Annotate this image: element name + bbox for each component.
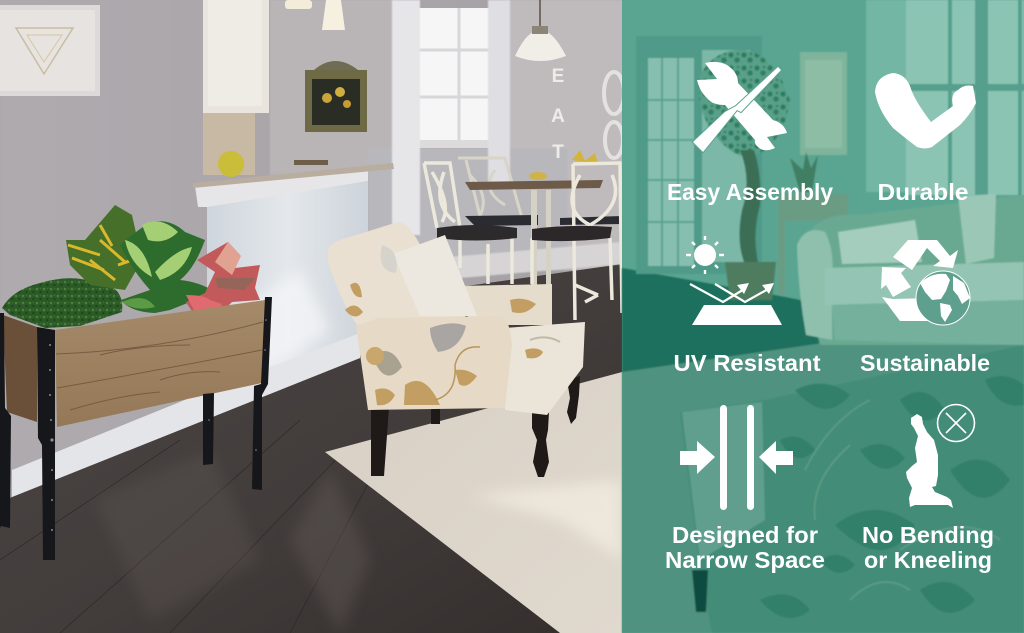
floral pattern [345,245,560,405]
tinted rug [622,342,1024,633]
teal overlay panel [622,0,1024,633]
feature: designed for narrow space [665,405,825,573]
icon: sun and reflected rays [686,236,782,325]
tinted flowers [790,152,818,192]
icon: wrench and screwdriver [693,62,787,152]
label: Sustainable: Sustainable [860,350,990,376]
dining set [424,150,622,320]
window [415,8,505,148]
large green leaves [120,221,215,313]
label: Designed for Narrow Space [665,522,825,573]
lemon on counter [218,151,328,177]
feature: UV resistant [674,236,821,376]
chair seat [505,322,585,415]
label: Durable: Durable [878,179,968,205]
backsplash [203,113,255,175]
rear baseboard [392,242,622,284]
icon: kneeling figure with crossed circle [906,404,974,508]
pink leaves [186,242,260,316]
tinted sofa [797,194,1024,345]
EAT wall letters: T [552,142,564,163]
chair legs [371,376,580,477]
globe [916,271,970,325]
label: No Bending or Kneeling: No Bending [862,522,994,548]
pendant lamp [515,0,566,61]
armchair [328,222,585,477]
wall medallions [604,72,624,158]
tinted curtain [866,0,906,192]
planter legs [0,297,272,560]
tinted floral pattern [760,376,1024,618]
chair front arm [356,316,512,410]
label: No Bending or Kneeling [862,522,994,573]
thyme foliage [2,278,122,328]
label: Easy Assembly: Easy Assembly [667,179,833,205]
label: No Bending or Kneeling: or Kneeling [864,547,992,573]
label: Designed for Narrow Space: Designed for [672,522,818,548]
curtains [392,0,510,235]
EAT wall letters: A [551,106,565,127]
EAT wall letters: E [552,66,564,87]
rug highlight [470,480,622,560]
label: Designed for Narrow Space: Narrow Space [665,547,825,573]
icon: flexed arm [875,73,976,148]
feature: sustainable [860,240,990,376]
white cabinet [203,0,269,113]
far arm [460,284,552,325]
chair back [328,222,470,325]
front wood panel [55,300,265,427]
ceiling lights [285,0,345,30]
feature: no bending or kneeling [862,404,994,573]
plants [2,205,260,328]
tinted room behind panel [622,0,1024,633]
tinted wall sign [800,52,847,155]
photo background: living room [0,0,625,633]
planter product [0,205,272,560]
feature: durable [875,73,976,205]
area rug [325,372,622,633]
EAT wall letters [551,66,565,163]
tinted patio door [636,36,762,274]
wood grain [56,322,263,410]
tinted topiary tree [699,50,790,300]
feature: easy assembly [667,62,833,205]
tinted floor [622,268,1024,420]
panel base [622,0,1024,633]
throw pillow [393,235,477,316]
hardwood floor [0,264,622,633]
back walls [0,0,625,520]
icon: narrow space arrows [680,405,793,510]
tinted side table [778,194,848,295]
framed fruit painting [305,61,367,132]
baseboard [12,333,360,497]
tinted right window [906,0,1024,195]
label: UV Resistant: UV Resistant [674,350,821,376]
tinted armchair [680,345,1024,633]
framed triangle print [0,5,100,96]
left side panel [3,315,37,422]
croton leaves [66,205,142,290]
kitchen half wall [193,163,394,420]
icon: recycling arrows with globe [881,240,970,325]
